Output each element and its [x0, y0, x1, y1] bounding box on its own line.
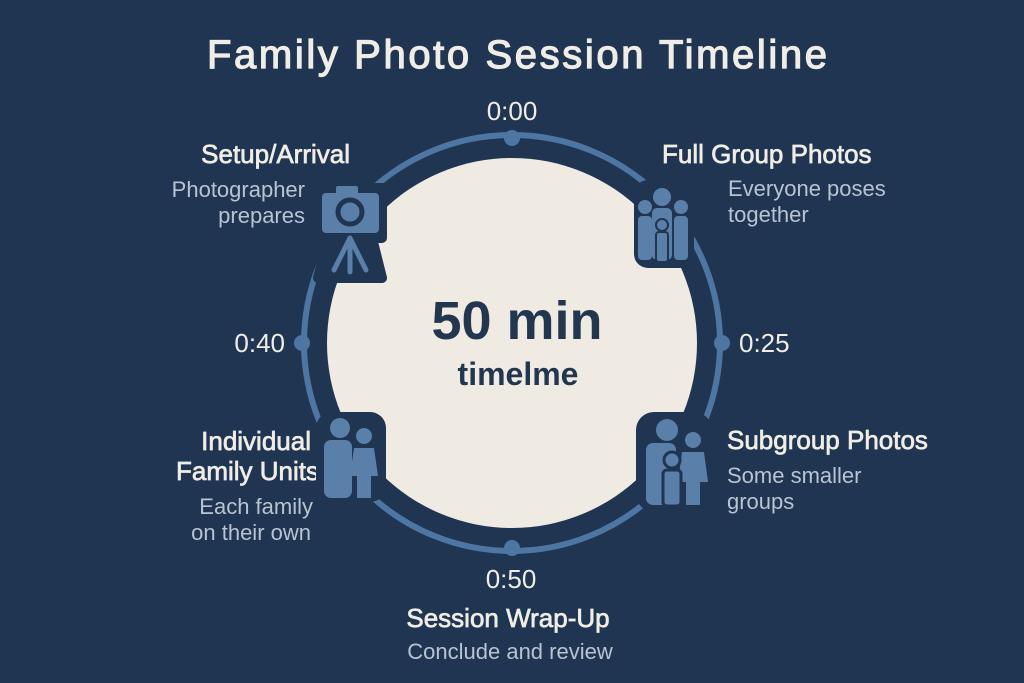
step: full group photos: Everyone poses: [728, 176, 886, 201]
time labels: [234, 96, 790, 594]
time labels: 0:40: [234, 328, 285, 358]
step: individual family units: [176, 426, 319, 545]
step: subgroup photos: [727, 425, 928, 514]
step: setup/arrival: Setup/Arrival: [201, 139, 350, 169]
time labels: 0:00: [487, 96, 537, 126]
step: subgroup photos: Some smaller: [727, 463, 861, 488]
time labels: 0:50: [486, 564, 536, 594]
timeline ring: [294, 130, 730, 556]
icon: camera on tripod: [318, 186, 382, 278]
step: session wrap-up: [406, 603, 613, 664]
center label: timelme: [458, 356, 578, 392]
step: setup/arrival: prepares: [218, 203, 305, 228]
step: individual family units: Each family: [199, 494, 313, 519]
time labels: 0:25: [739, 328, 790, 358]
icon: subgroup: [636, 412, 712, 512]
center label: [431, 291, 603, 392]
title: Family Photo Session Timeline: [207, 33, 827, 77]
icon: full group: [634, 180, 694, 268]
step: individual family units: Individual: [201, 426, 311, 456]
step: individual family units: Family Units: [176, 456, 319, 486]
step: session wrap-up: Conclude and review: [407, 639, 613, 664]
step: individual family units: on their own: [191, 520, 311, 545]
step: subgroup photos: groups: [727, 489, 794, 514]
icon: family: [316, 412, 386, 502]
step: full group photos: [662, 139, 886, 227]
step: full group photos: Full Group Photos: [662, 139, 872, 169]
step: subgroup photos: Subgroup Photos: [727, 425, 928, 455]
step: setup/arrival: [172, 139, 350, 228]
step: setup/arrival: Photographer: [172, 177, 305, 202]
step: full group photos: together: [728, 202, 809, 227]
center label: 50 min: [431, 291, 603, 351]
step: session wrap-up: Session Wrap-Up: [406, 603, 610, 633]
